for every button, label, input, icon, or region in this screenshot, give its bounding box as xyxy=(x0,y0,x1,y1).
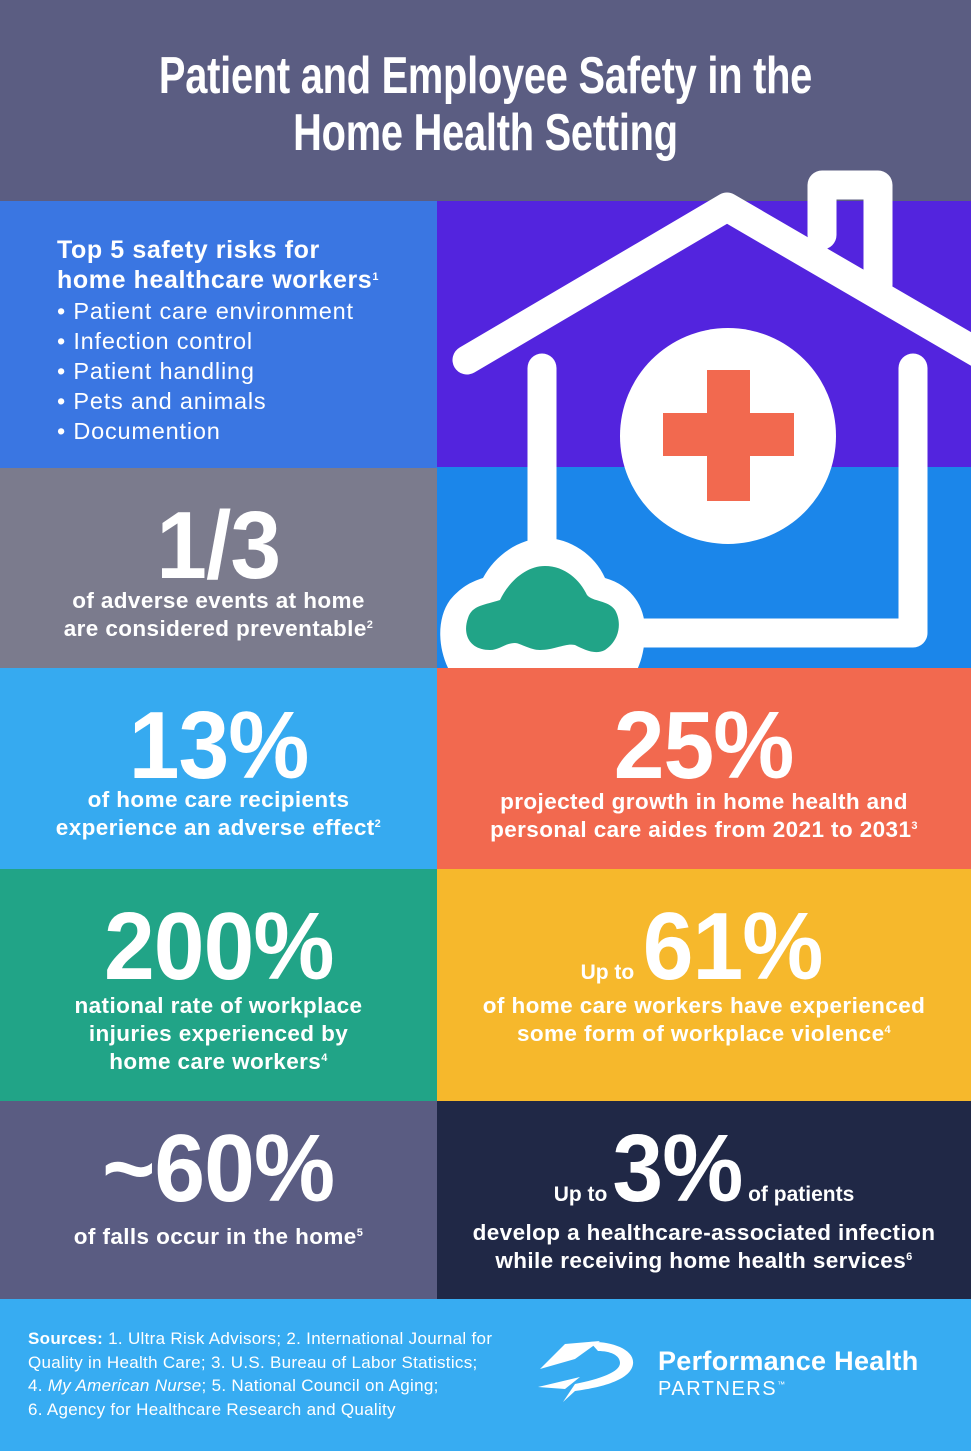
risks heading xyxy=(57,236,379,294)
sources: 4. My American Nurse; 5. National Council on Aging; xyxy=(28,1376,439,1395)
panel: 1/3 xyxy=(0,468,437,668)
panel: 60% xyxy=(0,1101,437,1299)
panel: 200%: 200% xyxy=(104,893,333,1000)
panel: 13% xyxy=(0,668,437,869)
title xyxy=(159,47,812,162)
risks list: • Infection control xyxy=(57,328,253,354)
panel: 25%: personal care aides from 2021 to 20313 xyxy=(490,817,918,842)
logo text: Performance Health xyxy=(658,1346,918,1376)
panel: 61%: Up to xyxy=(581,961,634,984)
sources: Quality in Health Care; 3. U.S. Bureau of Labor Statistics; xyxy=(28,1352,478,1372)
panel: house background xyxy=(437,201,971,668)
panel: 200%: national rate of workplace xyxy=(74,993,362,1018)
risks list: • Patient care environment xyxy=(57,298,354,324)
footer: PARTNERS™ xyxy=(658,1378,787,1400)
sources: 6. Agency for Healthcare Research and Quality xyxy=(28,1400,396,1418)
panel: 25% xyxy=(437,668,971,869)
panel: 3% xyxy=(437,1101,971,1299)
panel: 13%: of home care recipients xyxy=(88,787,349,812)
title: Home Health Setting xyxy=(293,104,678,162)
panel: top 5 risks xyxy=(0,201,437,468)
title: Patient and Employee Safety in the xyxy=(159,47,812,105)
panel: 200%: injuries experienced by xyxy=(89,1021,348,1046)
panel: 61% xyxy=(437,869,971,1101)
logo icon xyxy=(538,1341,634,1402)
sources xyxy=(28,1329,492,1418)
footer xyxy=(0,1299,971,1451)
panel: 25%: 25% xyxy=(614,692,794,799)
panel: 3%: while receiving home health services6 xyxy=(495,1248,913,1273)
risks list: • Pets and animals xyxy=(57,388,266,414)
panel: 60%: of falls occur in the home5 xyxy=(74,1224,363,1249)
panel: 25%: projected growth in home health and xyxy=(500,789,908,814)
panel: 61%: of home care workers have experienced xyxy=(483,993,925,1018)
risks list: • Patient handling xyxy=(57,358,255,384)
risks heading: home healthcare workers1 xyxy=(57,266,379,294)
risks list: • Documention xyxy=(57,418,221,444)
panel: 3%: 3% xyxy=(613,1115,743,1222)
panel: 1/3: of adverse events at home xyxy=(72,588,365,613)
sources: Sources: 1. Ultra Risk Advisors; 2. International Journal for xyxy=(28,1329,492,1348)
panel: 200%: home care workers4 xyxy=(109,1049,328,1074)
panel: 3%: Up to of patients xyxy=(554,1183,854,1206)
icon: house with medical cross xyxy=(440,170,971,668)
panel: 13%: experience an adverse effect2 xyxy=(56,815,381,840)
panel: 61%: some form of workplace violence4 xyxy=(517,1021,891,1046)
panel: 13%: 13% xyxy=(129,692,308,799)
panel: 1/3: are considered preventable2 xyxy=(64,616,373,641)
panel: 3%: develop a healthcare-associated infection xyxy=(473,1220,935,1245)
panel: 1/3: 1/3 xyxy=(157,492,280,599)
panel: 200% xyxy=(0,869,437,1101)
panel: 61%: 61% xyxy=(643,893,823,1000)
risks list xyxy=(57,298,354,444)
risks heading: Top 5 safety risks for xyxy=(57,236,320,264)
panel: 60%: ~60% xyxy=(102,1115,334,1222)
header xyxy=(0,0,971,201)
